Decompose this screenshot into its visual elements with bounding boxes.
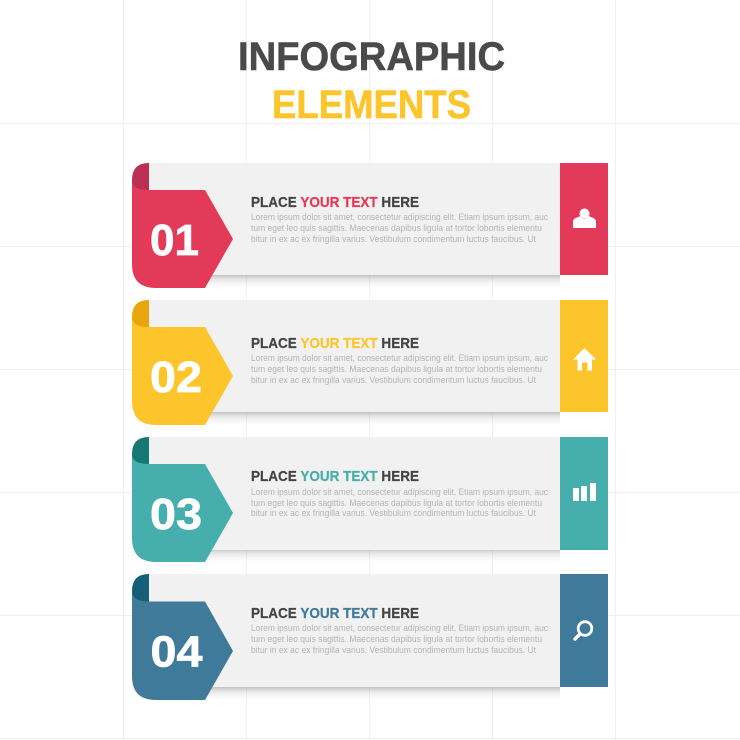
ribbon 03 xyxy=(132,454,233,562)
ribbon fold 03 xyxy=(132,437,149,464)
number 02: 02 xyxy=(150,353,202,402)
body text 03: Lorem ipsum dolor sit amet, consectetur adipiscing elit. Etiam ipsum ipsum, auc xyxy=(251,487,548,498)
icon tab 01 xyxy=(560,163,608,275)
card shadow 03 xyxy=(205,549,560,562)
card shadow 02 xyxy=(205,412,560,425)
heading 03: PLACE YOUR TEXT HERE xyxy=(251,468,419,485)
icon tab 04 xyxy=(560,574,608,687)
panel: step 03 xyxy=(132,437,608,562)
ribbon fold 01 xyxy=(132,163,149,190)
text card 02 xyxy=(149,300,560,412)
title: INFOGRAPHIC xyxy=(238,35,505,79)
number 03: 03 xyxy=(150,490,202,539)
text card 04 xyxy=(149,574,560,687)
body text 03: bitur in ex ac ex fringilla varius. Vestibulum condimentum luctus faucibus. Ut xyxy=(251,508,536,519)
number 04: 04 xyxy=(150,628,203,676)
icon tab 02 xyxy=(560,300,608,412)
icon: bar chart xyxy=(573,483,596,501)
title: ELEMENTS xyxy=(272,83,471,127)
number 01: 01 xyxy=(150,216,199,265)
body text 03: tum eget leo quis sagittis. Maecenas dapibus ligula at tortor lobortis elementu xyxy=(251,498,542,509)
card shadow 04 xyxy=(205,687,560,700)
text card 01 xyxy=(149,163,560,275)
ribbon fold 02 xyxy=(132,300,149,327)
panel: step 01 xyxy=(132,163,608,288)
body text 04: Lorem ipsum dolor sit amet, consectetur adipiscing elit. Etiam ipsum ipsum, auc xyxy=(251,623,548,634)
ribbon fold 04 xyxy=(132,574,149,602)
ribbon 04 xyxy=(132,591,233,700)
ribbon 01 xyxy=(132,180,233,288)
title xyxy=(238,35,505,127)
body text 04: tum eget leo quis sagittis. Maecenas dapibus ligula at tortor lobortis elementu xyxy=(251,634,542,645)
icon tab 03 xyxy=(560,437,608,550)
icon: person xyxy=(573,208,596,228)
body text 04: bitur in ex ac ex fringilla varius. Vestibulum condimentum luctus faucibus. Ut xyxy=(251,645,536,656)
card shadow 01 xyxy=(205,275,560,288)
body text 02: Lorem ipsum dolor sit amet, consectetur adipiscing elit. Etiam ipsum ipsum, auc xyxy=(251,353,548,364)
icon: house xyxy=(573,348,596,370)
body text 01: Lorem ipsum dolor sit amet, consectetur adipiscing elit. Etiam ipsum ipsum, auc xyxy=(251,212,548,223)
body text 02: bitur in ex ac ex fringilla varius. Vestibulum condimentum luctus faucibus. Ut xyxy=(251,375,536,386)
heading 02: PLACE YOUR TEXT HERE xyxy=(251,335,419,352)
icon: magnifier xyxy=(575,622,592,639)
panel: step 02 xyxy=(132,300,608,425)
body text 02 xyxy=(251,353,548,386)
body text 02: tum eget leo quis sagittis. Maecenas dapibus ligula at tortor lobortis elementu xyxy=(251,364,542,375)
panel: step 04 xyxy=(132,574,608,700)
body text 01: bitur in ex ac ex fringilla varius. Vestibulum condimentum luctus faucibus. Ut xyxy=(251,234,536,245)
text card 03 xyxy=(149,437,560,550)
heading 04: PLACE YOUR TEXT HERE xyxy=(251,605,419,622)
body text 01: tum eget leo quis sagittis. Maecenas dapibus ligula at tortor lobortis elementu xyxy=(251,223,542,234)
body text 04 xyxy=(251,623,548,656)
body text 03 xyxy=(251,487,548,519)
body text 01 xyxy=(251,212,548,245)
ribbon 02 xyxy=(132,317,233,425)
heading 01: PLACE YOUR TEXT HERE xyxy=(251,194,419,211)
